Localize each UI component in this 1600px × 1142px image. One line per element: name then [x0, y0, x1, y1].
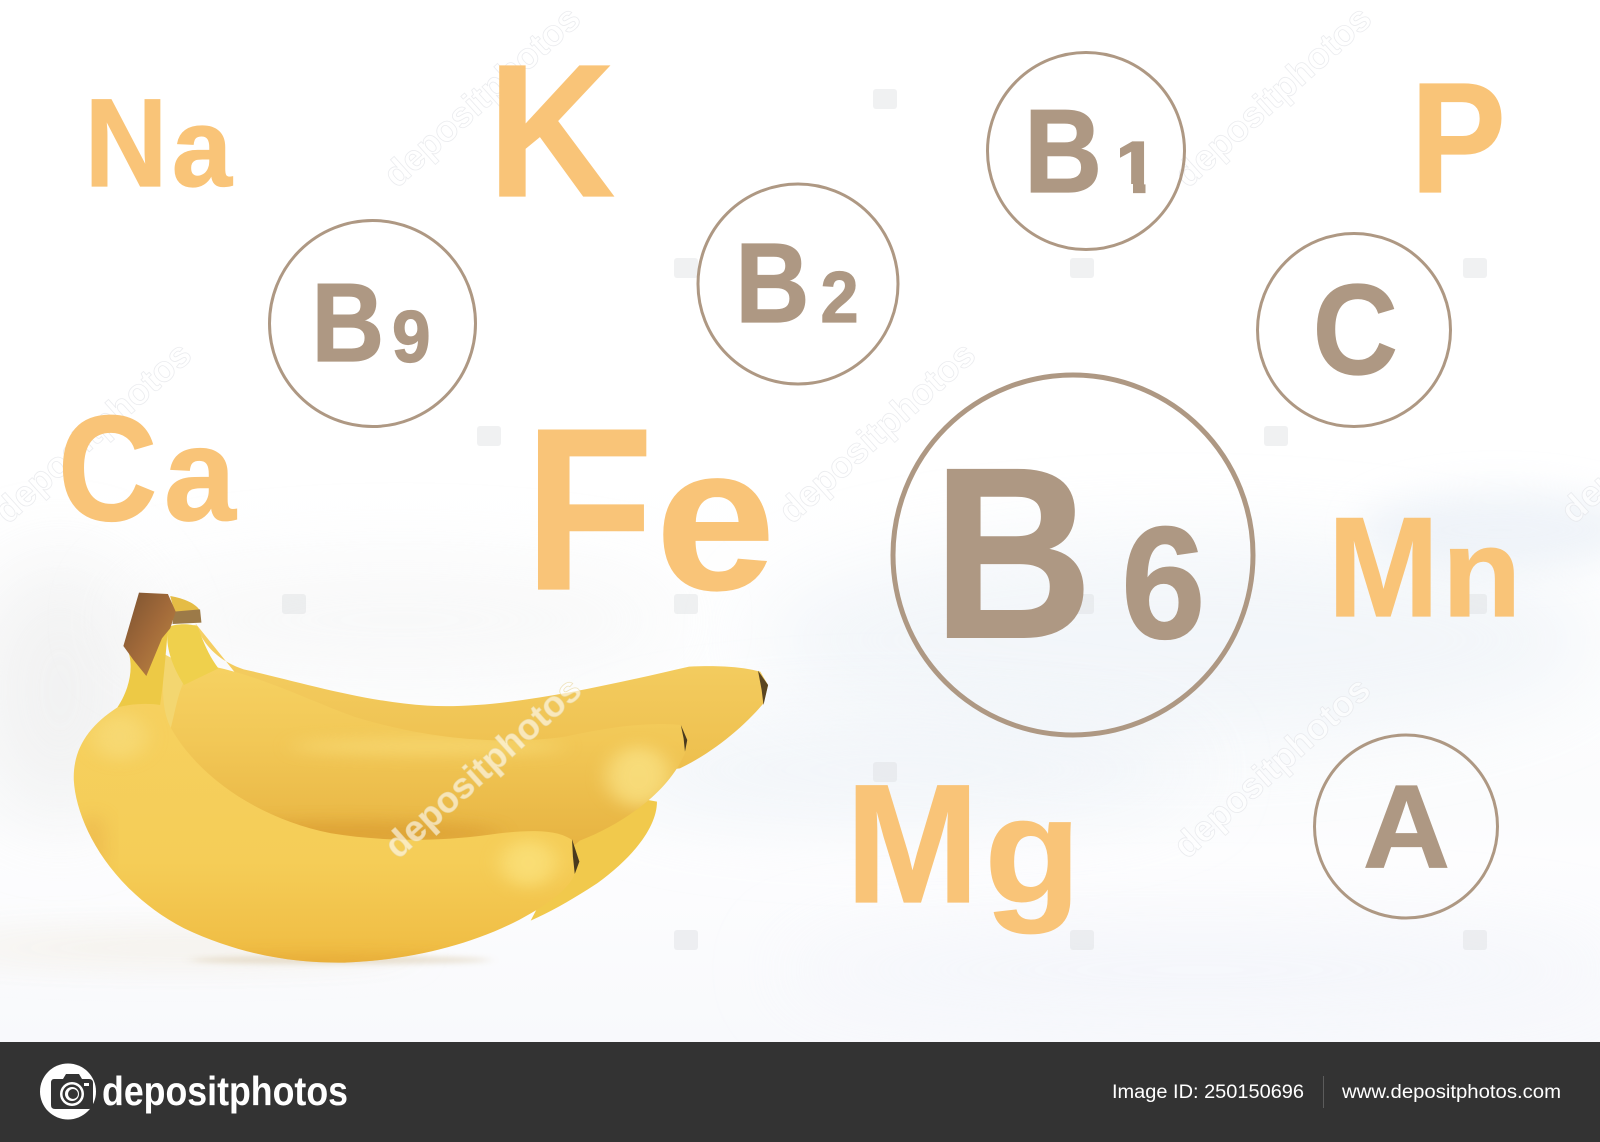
middle banana tip	[681, 725, 687, 752]
vitamin circle: B9: 9	[392, 297, 431, 378]
front banana tip	[572, 839, 579, 874]
vitamin circle: C: C	[1313, 260, 1398, 402]
watermark: depositphotos diagonal text: depositphotos	[375, 0, 588, 195]
watermark: depositphotos diagonal text: depositphotos	[1165, 668, 1378, 866]
brown crown band	[173, 609, 201, 624]
mineral: Mg: M	[846, 749, 979, 938]
footer logo wordmark: depositphotos	[102, 1068, 348, 1114]
mineral: Na: a	[172, 87, 233, 210]
back banana tip	[758, 671, 768, 705]
mineral: Na: N	[84, 74, 168, 213]
hidden banana behind stems	[152, 650, 202, 743]
lower back banana	[531, 797, 657, 921]
brown cut stem	[123, 593, 176, 676]
illustration: bunch of bananas	[74, 593, 768, 971]
footer website: www.depositphotos.com	[1341, 1082, 1561, 1103]
middle banana	[167, 625, 687, 853]
mineral: Fe: e	[656, 404, 775, 633]
mineral: K: K	[488, 25, 615, 236]
vitamin circle: B1: B	[1024, 85, 1102, 218]
back banana	[195, 623, 768, 777]
watermark: small camera marks	[282, 89, 1487, 950]
mineral: Mg: g	[984, 766, 1081, 934]
mineral: Mn	[1328, 488, 1521, 647]
vitamin circle: A	[1314, 735, 1498, 918]
vitamin circle: B2: 2	[820, 256, 859, 337]
front banana	[74, 628, 579, 963]
watermark: depositphotos diagonal text	[0, 0, 1600, 866]
vitamin circle: B9	[270, 220, 476, 426]
front banana shading	[80, 713, 556, 971]
stem of middle banana	[167, 624, 218, 685]
mineral: Ca	[58, 385, 237, 552]
vitamin circle: A: A	[1363, 761, 1450, 893]
vitamin circle: B2	[698, 184, 898, 384]
mineral: Mn: M	[1328, 488, 1439, 647]
watermark over bananas: depositphotos	[376, 668, 589, 866]
watermark: depositphotos diagonal text: depositphotos	[1166, 0, 1379, 195]
vitamin circle: C	[1258, 234, 1450, 426]
vitamin circle: B1	[988, 52, 1184, 250]
yellow crown of stems	[170, 596, 200, 613]
mineral: P: P	[1410, 50, 1506, 225]
mineral: Mg	[846, 749, 1081, 938]
mineral: Ca: a	[164, 399, 237, 548]
vitamin circle: B2: B	[735, 219, 810, 346]
footer image id: Image ID: 250150696	[1112, 1082, 1304, 1103]
banana shadow on table	[190, 956, 490, 964]
vitamin circle: B9: B	[311, 262, 384, 385]
watermark: depositphotos diagonal text: depositphotos	[770, 333, 983, 531]
vitamin circle: B1: 1	[1112, 127, 1159, 208]
vitamin circle: B6	[893, 375, 1253, 735]
vitamin circle: B6: B	[933, 418, 1093, 689]
mineral: Fe: F	[524, 380, 654, 638]
middle banana shading	[189, 738, 671, 845]
mineral: Mn: n	[1442, 503, 1521, 644]
footer logo icon: camera	[40, 1064, 96, 1120]
stem of front banana	[117, 628, 168, 707]
mineral: Na	[84, 74, 233, 213]
mineral: Fe	[524, 380, 775, 638]
mineral: Ca: C	[58, 385, 157, 552]
vitamin circle: B6: 6	[1121, 494, 1206, 673]
footer bar	[0, 1042, 1600, 1142]
